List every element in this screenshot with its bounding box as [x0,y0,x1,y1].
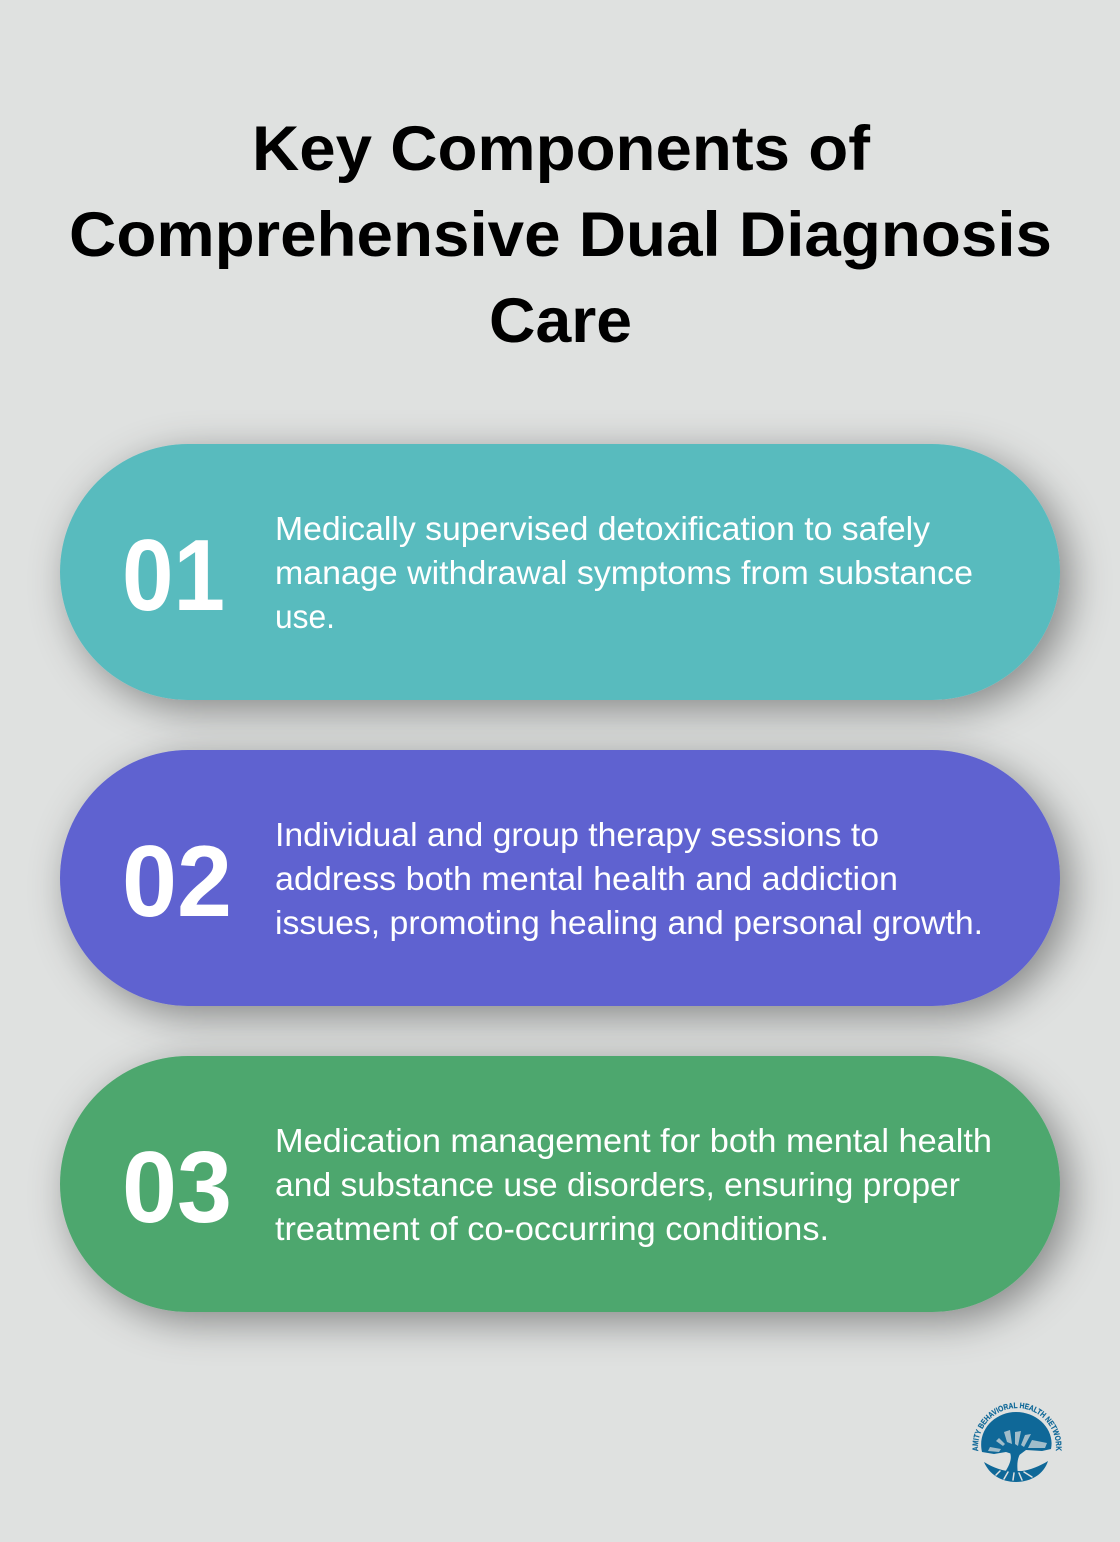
title: Key Components of [252,114,871,184]
title: Comprehensive Dual Diagnosis [69,200,1052,270]
step number 02: 02 [122,826,232,938]
logo canopy [981,1412,1052,1456]
logo root lines [996,1471,1032,1480]
step text 01: manage withdrawal symptoms from substance [275,554,973,591]
step number 03: 03 [122,1132,232,1244]
title: Care [489,286,632,356]
step text 01 [275,510,973,635]
step text 02: address both mental health and addiction [275,860,898,897]
step text 03: and substance use disorders, ensuring proper [275,1166,960,1203]
step text 03: treatment of co-occurring conditions. [275,1210,829,1247]
panel: step 02 [60,750,1060,1006]
logo trunk [1004,1450,1022,1474]
step number 01: 01 [122,520,225,632]
step text 03: Medication management for both mental health [275,1122,992,1159]
panel: step 01 [60,444,1060,700]
logo circular name: AMITY BEHAVIORAL HEALTH NETWORK [972,1402,1062,1452]
step text 01: use. [275,598,335,635]
panel: step 03 [60,1056,1060,1312]
step text 02: issues, promoting healing and personal growth. [275,904,983,941]
step text 01: Medically supervised detoxification to safely [275,510,931,547]
logo branches [988,1430,1047,1452]
icon: Amity Behavioral Health Network logo [972,1402,1062,1482]
step text 03 [275,1122,992,1247]
title [69,114,1052,356]
logo roots bowl [984,1461,1048,1482]
step text 02: Individual and group therapy sessions to [275,816,879,853]
step text 02 [275,816,983,941]
